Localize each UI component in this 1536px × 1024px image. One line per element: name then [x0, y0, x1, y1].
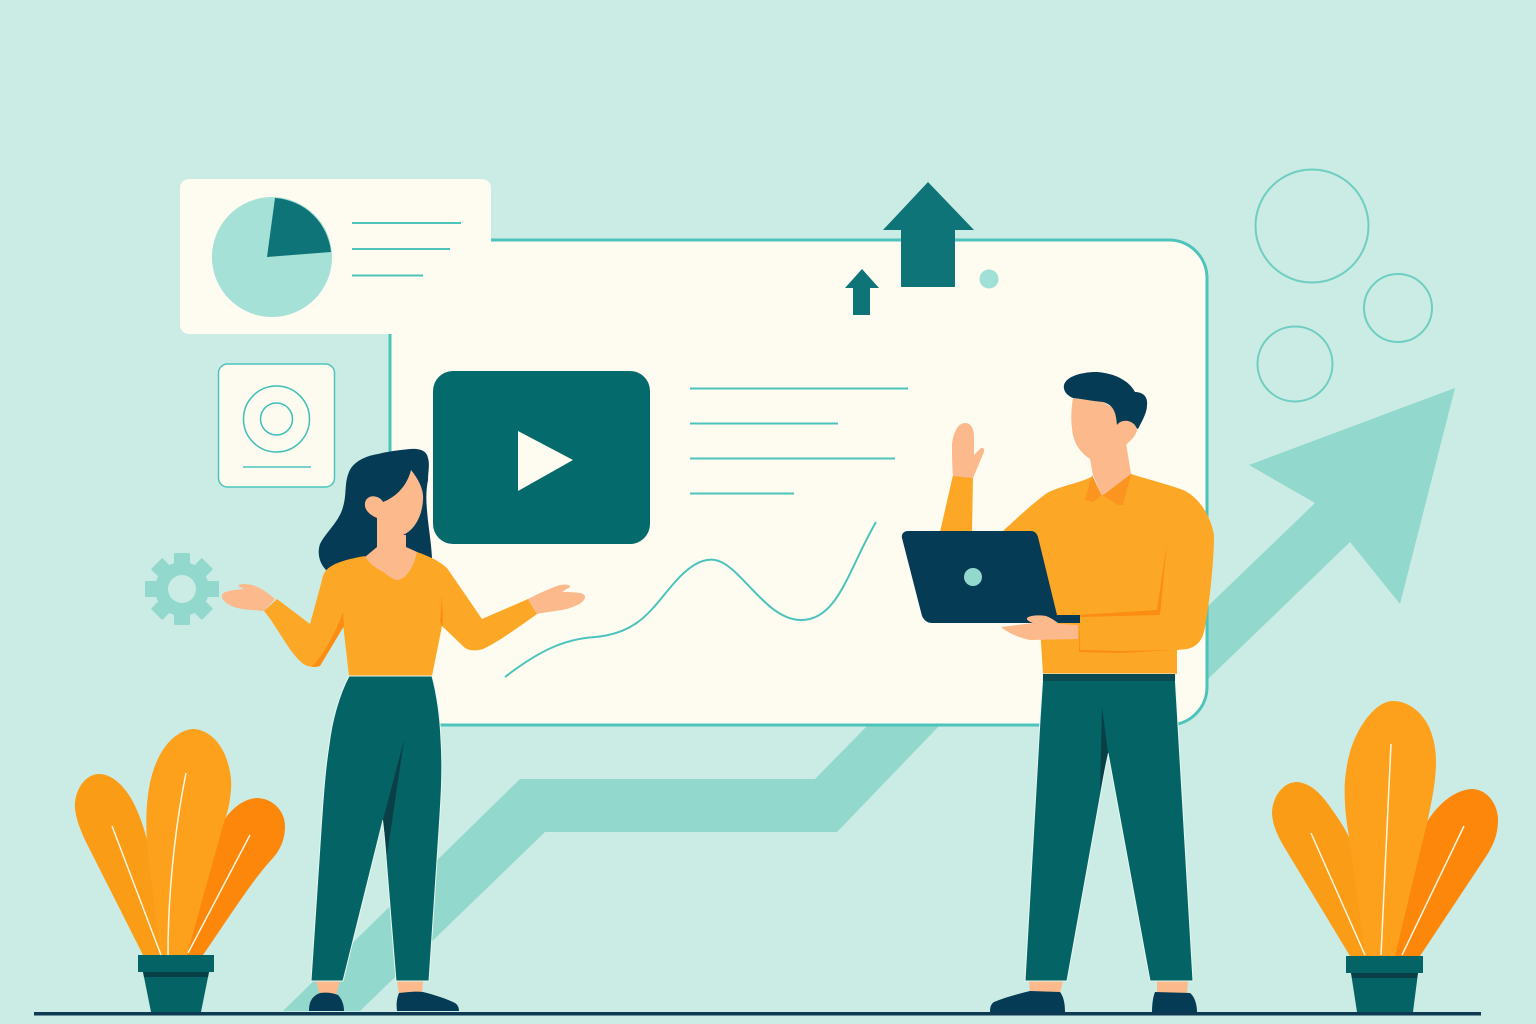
hair: [319, 449, 432, 572]
pot rim: [1346, 956, 1423, 973]
trousers: [311, 676, 442, 981]
waistband: [1043, 674, 1175, 681]
pot band: [1351, 973, 1418, 978]
text placeholder lines: [690, 388, 908, 494]
pot rim: [138, 955, 214, 972]
presentation board: [390, 182, 1207, 725]
right leaf: [1394, 789, 1498, 956]
icon: gear: [145, 553, 219, 625]
ankles: [1029, 981, 1188, 993]
decorative circles: [1256, 170, 1432, 402]
icon: large up arrow: [883, 182, 974, 287]
man figure: [902, 372, 1214, 1012]
right leaf: [186, 798, 285, 955]
collar: [1085, 474, 1131, 505]
panel: target card: [218, 364, 334, 487]
left leaf: [1272, 782, 1375, 956]
neck and face: [1071, 398, 1131, 496]
pot: [143, 972, 209, 1012]
status dot: [980, 270, 998, 288]
legend lines: [352, 223, 461, 276]
sweater: [1003, 474, 1214, 674]
ear: [1117, 421, 1137, 445]
sleeve shadow right: [440, 595, 443, 626]
raised arm: [940, 475, 973, 532]
pie chart: [212, 197, 332, 317]
sleeve shadow: [312, 612, 344, 667]
laptop logo: [964, 568, 982, 586]
sweater: [264, 552, 537, 676]
floor line: [34, 1012, 1481, 1016]
pot band: [143, 972, 209, 977]
trouser fold: [1100, 707, 1108, 790]
line chart curve: [505, 522, 876, 677]
trousers: [1025, 674, 1193, 981]
panel: pie chart card: [180, 179, 491, 334]
left leaf: [75, 774, 170, 955]
neck and face: [360, 470, 423, 585]
background growth arrow: [283, 388, 1455, 1011]
shoes: [990, 991, 1197, 1012]
trouser fold: [383, 740, 404, 855]
raised hand: [952, 423, 984, 478]
arm shadow: [1079, 542, 1167, 617]
cuff shadow: [1079, 620, 1177, 653]
centre leaf: [146, 729, 231, 955]
icon: play triangle: [518, 431, 573, 491]
left hand: [222, 584, 275, 611]
supporting hand: [1001, 615, 1078, 640]
woman figure: [222, 449, 585, 1011]
laptop: [902, 531, 1080, 623]
pot: [1351, 973, 1418, 1012]
hair: [1064, 372, 1147, 429]
icon: small up arrow: [845, 269, 879, 315]
leaf veins: [112, 773, 250, 955]
centre leaf: [1345, 701, 1436, 956]
left plant: [75, 729, 285, 1012]
shoes: [309, 992, 459, 1011]
leaf veins: [1311, 744, 1464, 955]
right plant: [1272, 701, 1498, 1012]
right hand: [528, 585, 585, 614]
icon: target rings: [244, 386, 310, 452]
caption line: [243, 466, 311, 468]
video player: [433, 371, 650, 544]
ankles: [316, 981, 423, 996]
